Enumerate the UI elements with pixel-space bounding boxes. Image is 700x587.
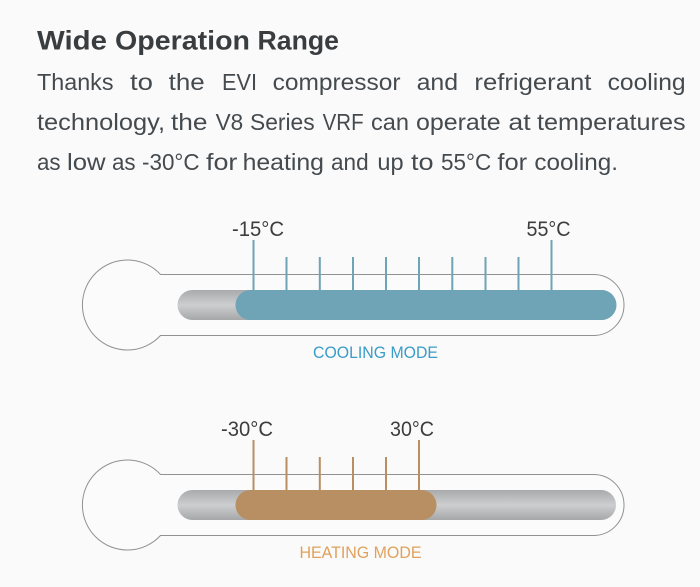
thermometer outline xyxy=(82,260,624,350)
intro text: technology, xyxy=(37,109,165,135)
title: Wide xyxy=(37,26,107,56)
intro text: heating xyxy=(243,149,324,175)
intro text: Thanks xyxy=(37,69,114,95)
tick marks xyxy=(254,440,419,491)
intro text: refrigerant xyxy=(474,69,592,95)
intro text: and xyxy=(417,69,458,95)
intro text: to xyxy=(411,149,434,175)
intro text: to xyxy=(130,69,153,95)
label: 30°C: 30°C xyxy=(390,418,434,441)
intro text: for xyxy=(497,149,528,175)
label: -30°C: -30°C xyxy=(221,418,273,441)
intro text: temperatures xyxy=(537,109,686,135)
cooling mode label: COOLING MODE xyxy=(313,344,438,362)
intro text: for xyxy=(206,149,238,175)
intro text: as xyxy=(37,149,61,175)
title: Range xyxy=(258,26,339,56)
label: 55°C: 55°C xyxy=(526,218,570,241)
intro text: 55°C xyxy=(441,149,491,175)
intro text: low xyxy=(67,149,106,175)
intro text: cooling xyxy=(608,69,686,95)
grey tube xyxy=(178,290,616,320)
intro text: at xyxy=(508,109,531,135)
title xyxy=(37,26,339,56)
intro text: and xyxy=(331,149,369,175)
intro text: up xyxy=(377,149,404,175)
intro text: EVI xyxy=(222,69,257,95)
orange range bar xyxy=(236,490,436,520)
heating thermometer xyxy=(82,418,624,562)
intro text: operate xyxy=(416,109,501,135)
intro text: VRF xyxy=(323,109,364,135)
intro text: as xyxy=(112,149,136,175)
title: Operation xyxy=(115,26,250,56)
intro text: can xyxy=(371,109,409,135)
thermometer outline xyxy=(82,460,624,550)
intro text: cooling. xyxy=(534,149,618,175)
blue range bar xyxy=(236,290,616,320)
cooling thermometer xyxy=(82,218,624,362)
intro text xyxy=(37,69,686,175)
intro text: -30°C xyxy=(142,149,200,175)
intro text: the xyxy=(169,69,205,95)
tick marks xyxy=(254,240,552,291)
intro text: compressor xyxy=(273,69,401,95)
intro text: the xyxy=(171,109,208,135)
intro text: V8 xyxy=(216,109,243,135)
grey tube xyxy=(178,490,616,520)
label: -15°C: -15°C xyxy=(232,218,284,241)
intro text: Series xyxy=(250,109,315,135)
heating mode label: HEATING MODE xyxy=(300,544,422,562)
